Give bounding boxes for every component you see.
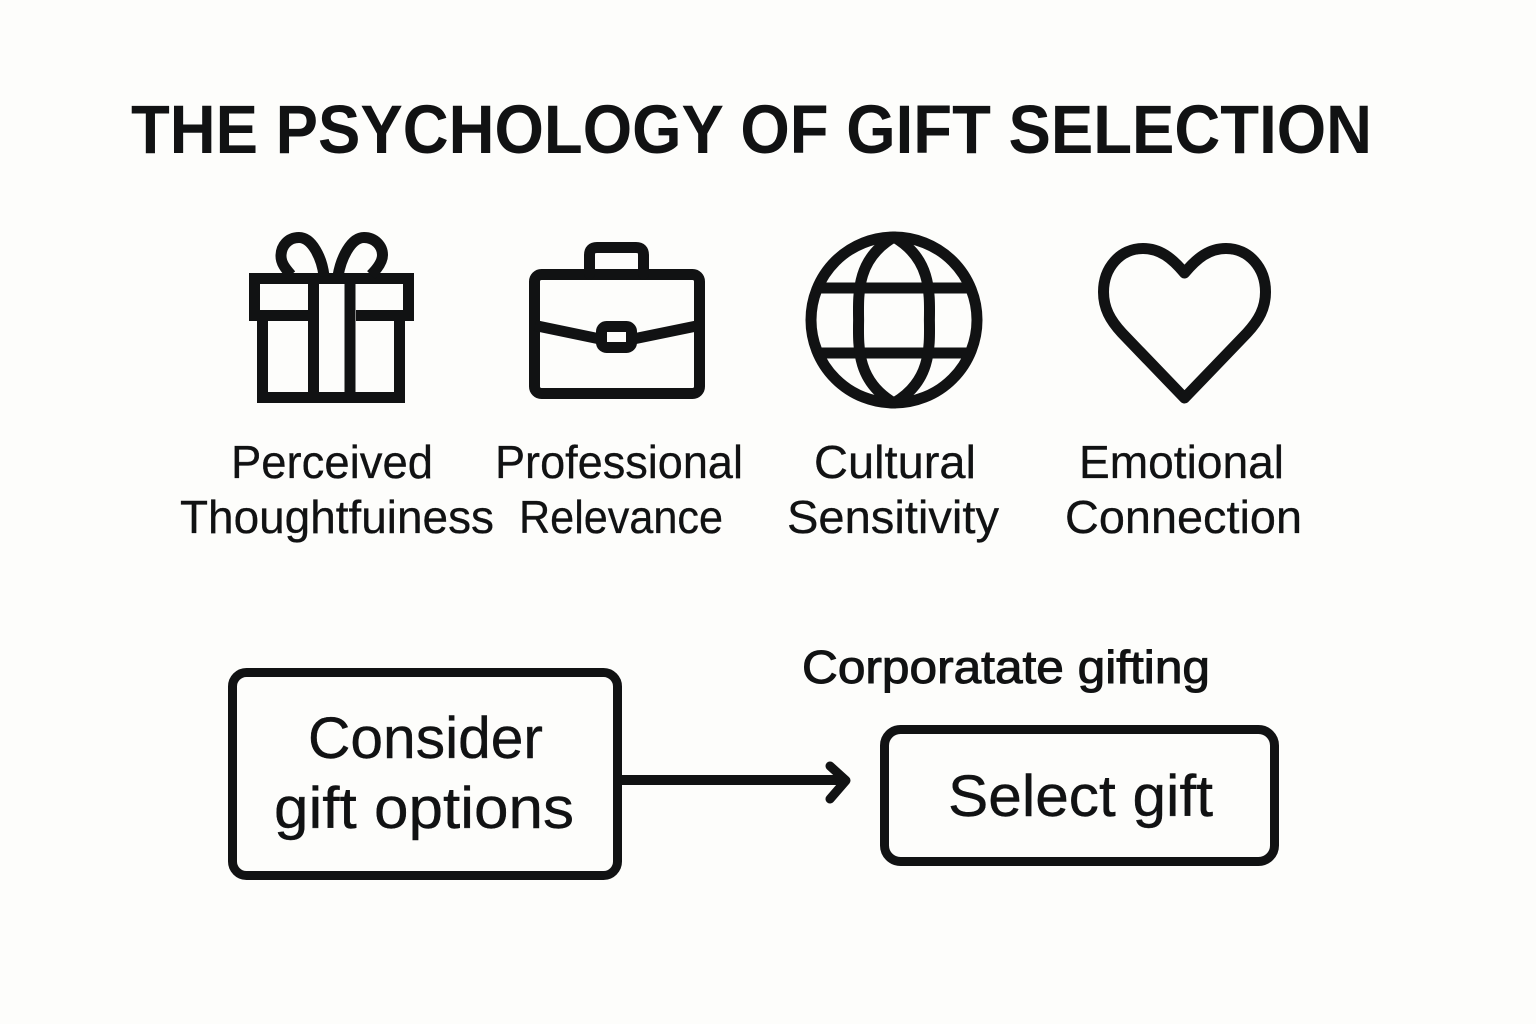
flow box: consider gift options [232,672,618,876]
flow box: consider gift options: Consider [308,706,543,771]
label: cultural sensitivity [787,436,999,543]
label: perceived thoughtfulness [180,436,494,543]
label: perceived thoughtfulness: Thoughtfuiness [180,491,494,543]
label: emotional connection [1065,436,1302,543]
label: professional relevance [495,436,743,543]
icon: briefcase [534,248,700,394]
icon: globe [811,237,977,403]
flow box: select gift [884,730,1274,862]
label: professional relevance: Relevance [519,491,723,543]
label: cultural sensitivity: Cultural [814,436,976,488]
label: emotional connection: Emotional [1079,436,1284,488]
title: THE PSYCHOLOGY OF GIFT SELECTION [131,91,1372,168]
label: cultural sensitivity: Sensitivity [787,491,999,543]
label: emotional connection: Connection [1065,491,1302,543]
label: perceived thoughtfulness: Perceived [231,436,433,488]
icon: gift box [254,238,408,398]
flow box: select gift: Select gift [948,764,1213,829]
annotation: corporate gifting: Corporatate gifting [802,641,1210,693]
arrow [622,766,846,799]
label: professional relevance: Professional [495,436,743,488]
flow box: consider gift options: gift options [274,776,574,841]
icon: heart [1104,248,1266,398]
